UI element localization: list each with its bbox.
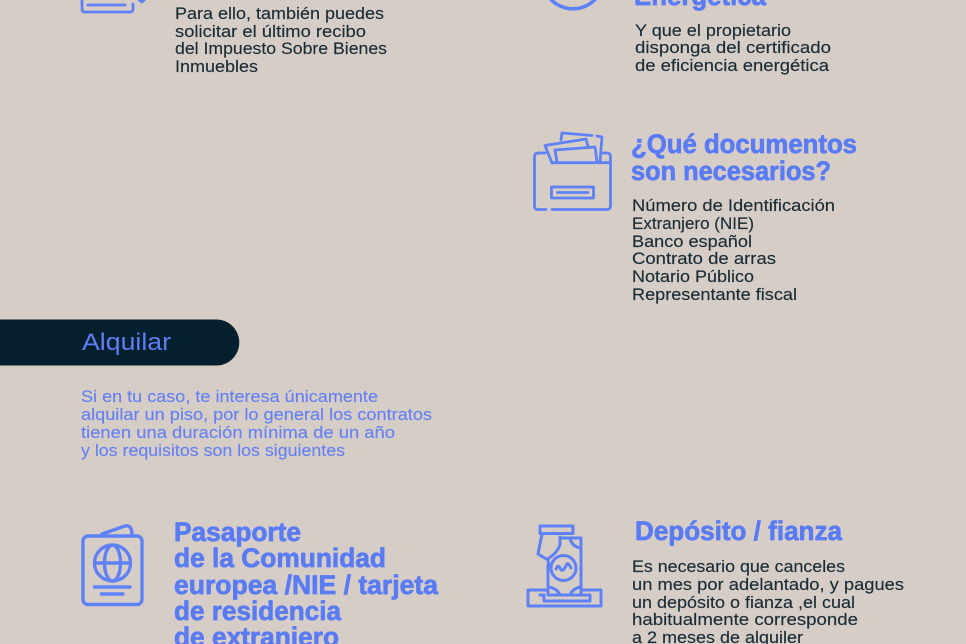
text block: Impuesto Sobre Bienes Inmuebles: Para ello, también puedes	[175, 4, 384, 23]
list: documentos necesarios: Banco español	[632, 232, 752, 251]
text block: certificado energético: disponga del certificado	[635, 38, 831, 57]
heading: Pasaporte	[174, 517, 438, 644]
text block: certificado energético: Y que el propietario	[635, 21, 791, 40]
list: documentos necesarios: Extranjero (NIE)	[632, 214, 754, 233]
list: documentos necesarios: Contrato de arras	[632, 249, 776, 268]
heading: Pasaporte: de residencia	[174, 596, 341, 626]
heading: Pasaporte: Pasaporte	[174, 517, 301, 547]
text block: depósito: habitualmente corresponde	[632, 610, 858, 629]
text block: introducción alquiler: alquilar un piso, por lo general los contratos	[81, 405, 432, 424]
text block: introducción alquiler: Si en tu caso, te interesa únicamente	[81, 387, 378, 406]
list: documentos necesarios: Representante fiscal	[632, 285, 797, 304]
heading: ¿Qué documentos son necesarios?: ¿Qué documentos	[631, 129, 857, 159]
icon: file drawer with documents	[534, 133, 610, 210]
icon: banknote deposit	[528, 526, 601, 606]
heading: ¿Qué documentos son necesarios?: son necesarios?	[631, 156, 831, 186]
section banner: Alquilar: Alquilar	[82, 329, 171, 356]
heading: Depósito / fianza: Depósito / fianza	[635, 516, 842, 546]
text block: Impuesto Sobre Bienes Inmuebles: del Impuesto Sobre Bienes	[175, 39, 387, 58]
section banner: Alquilar	[0, 320, 239, 366]
icon: passport	[83, 526, 142, 604]
icon: energy circle (cropped)	[546, 0, 600, 9]
text block: depósito: un depósito o fianza ,el cual	[632, 593, 855, 612]
text block: depósito: un mes por adelantado, y pagues	[632, 575, 904, 594]
heading: Pasaporte: europea /NIE / tarjeta	[174, 570, 438, 600]
text block: depósito	[632, 557, 904, 644]
text block: Impuesto Sobre Bienes Inmuebles: solicitar el último recibo	[175, 22, 366, 41]
text block: introducción alquiler	[81, 387, 432, 460]
list: documentos necesarios: Número de Identificación	[632, 196, 835, 215]
text block: Impuesto Sobre Bienes Inmuebles: Inmuebles	[175, 57, 258, 76]
icon: document (cropped)	[82, 0, 147, 12]
heading: ¿Qué documentos son necesarios?	[631, 129, 857, 186]
text block: certificado energético: de eficiencia energética	[635, 56, 830, 75]
list: documentos necesarios: Notario Público	[632, 267, 754, 286]
text block: certificado energético	[635, 21, 831, 75]
text block: depósito: Es necesario que canceles	[632, 557, 845, 576]
list: documentos necesarios	[632, 196, 835, 304]
text block: introducción alquiler: tienen una duración mínima de un año	[81, 423, 395, 442]
heading: Pasaporte: de la Comunidad	[174, 543, 386, 573]
text block: introducción alquiler: y los requisitos son los siguientes	[81, 441, 345, 460]
text block: Impuesto Sobre Bienes Inmuebles	[175, 4, 387, 76]
